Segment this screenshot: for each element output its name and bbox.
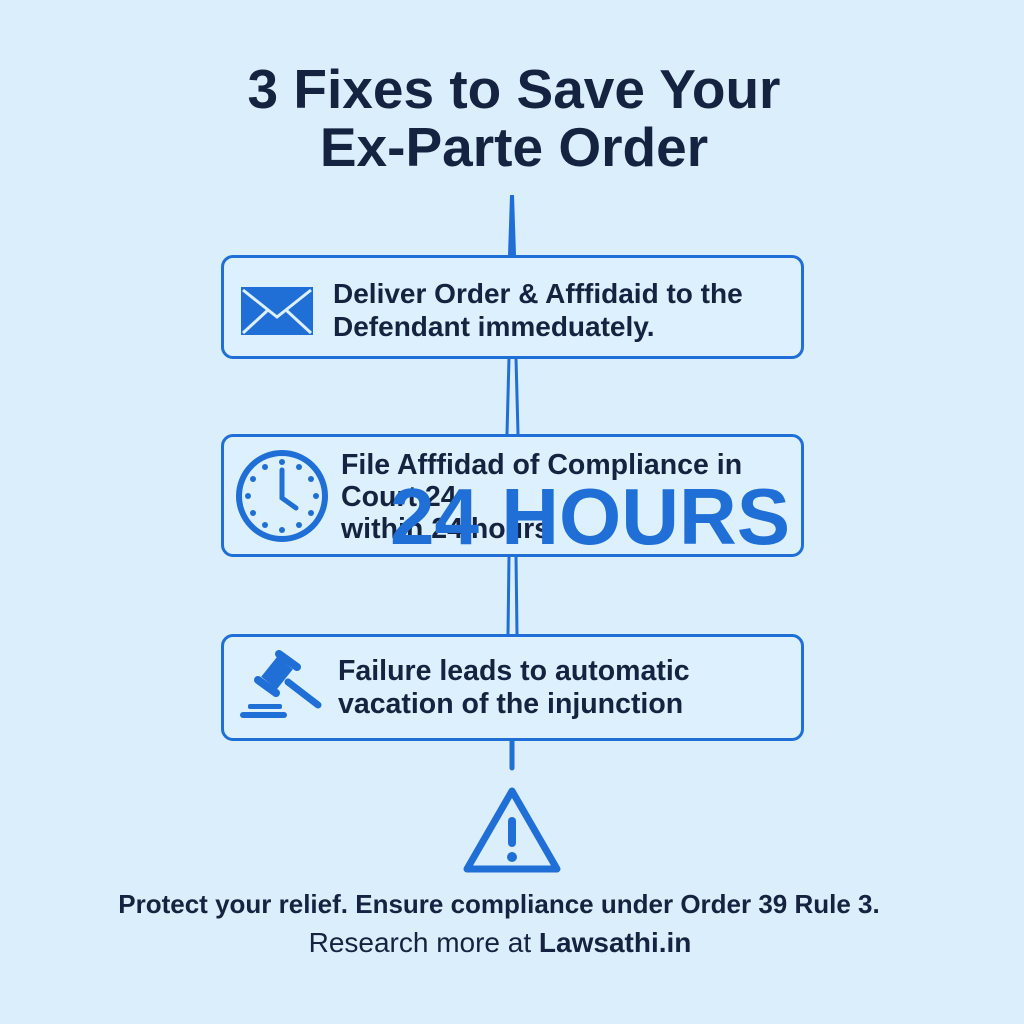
- panel: step 1: [221, 255, 804, 359]
- icon: gavel: [240, 650, 322, 718]
- panel: step 3: [221, 634, 804, 741]
- text: step 3: Failure leads to automatic: [338, 655, 690, 687]
- text: step 1: [333, 278, 743, 342]
- icon: clock: [236, 450, 328, 542]
- panel: step 2: [221, 434, 804, 557]
- icon: envelope: [241, 287, 313, 335]
- title: Ex-Parte Order: [320, 116, 708, 178]
- text: step 3: [338, 655, 690, 720]
- footer: compliance note: Protect your relief. Ensure compliance under Order 39 Rule 3.: [118, 889, 880, 919]
- text: step 1: Deliver Order & Afffidaid to the: [333, 278, 743, 309]
- footer: source: Research more at Lawsathi.in: [309, 927, 691, 958]
- icon: warning: [464, 788, 560, 872]
- text: step 2: [340, 449, 742, 545]
- text: step 1: Defendant immeduately.: [333, 311, 655, 342]
- text: step 2: File Afffidad of Compliance in: [341, 449, 742, 481]
- text: step 2: within 24 hours: [341, 513, 550, 545]
- text: step 2: Court 24: [341, 481, 457, 513]
- title: 3 Fixes to Save Your: [248, 58, 780, 120]
- callout: 24 HOURS: 24 HOURS: [390, 472, 790, 561]
- text: step 3: vacation of the injunction: [338, 688, 683, 720]
- title: [248, 58, 780, 178]
